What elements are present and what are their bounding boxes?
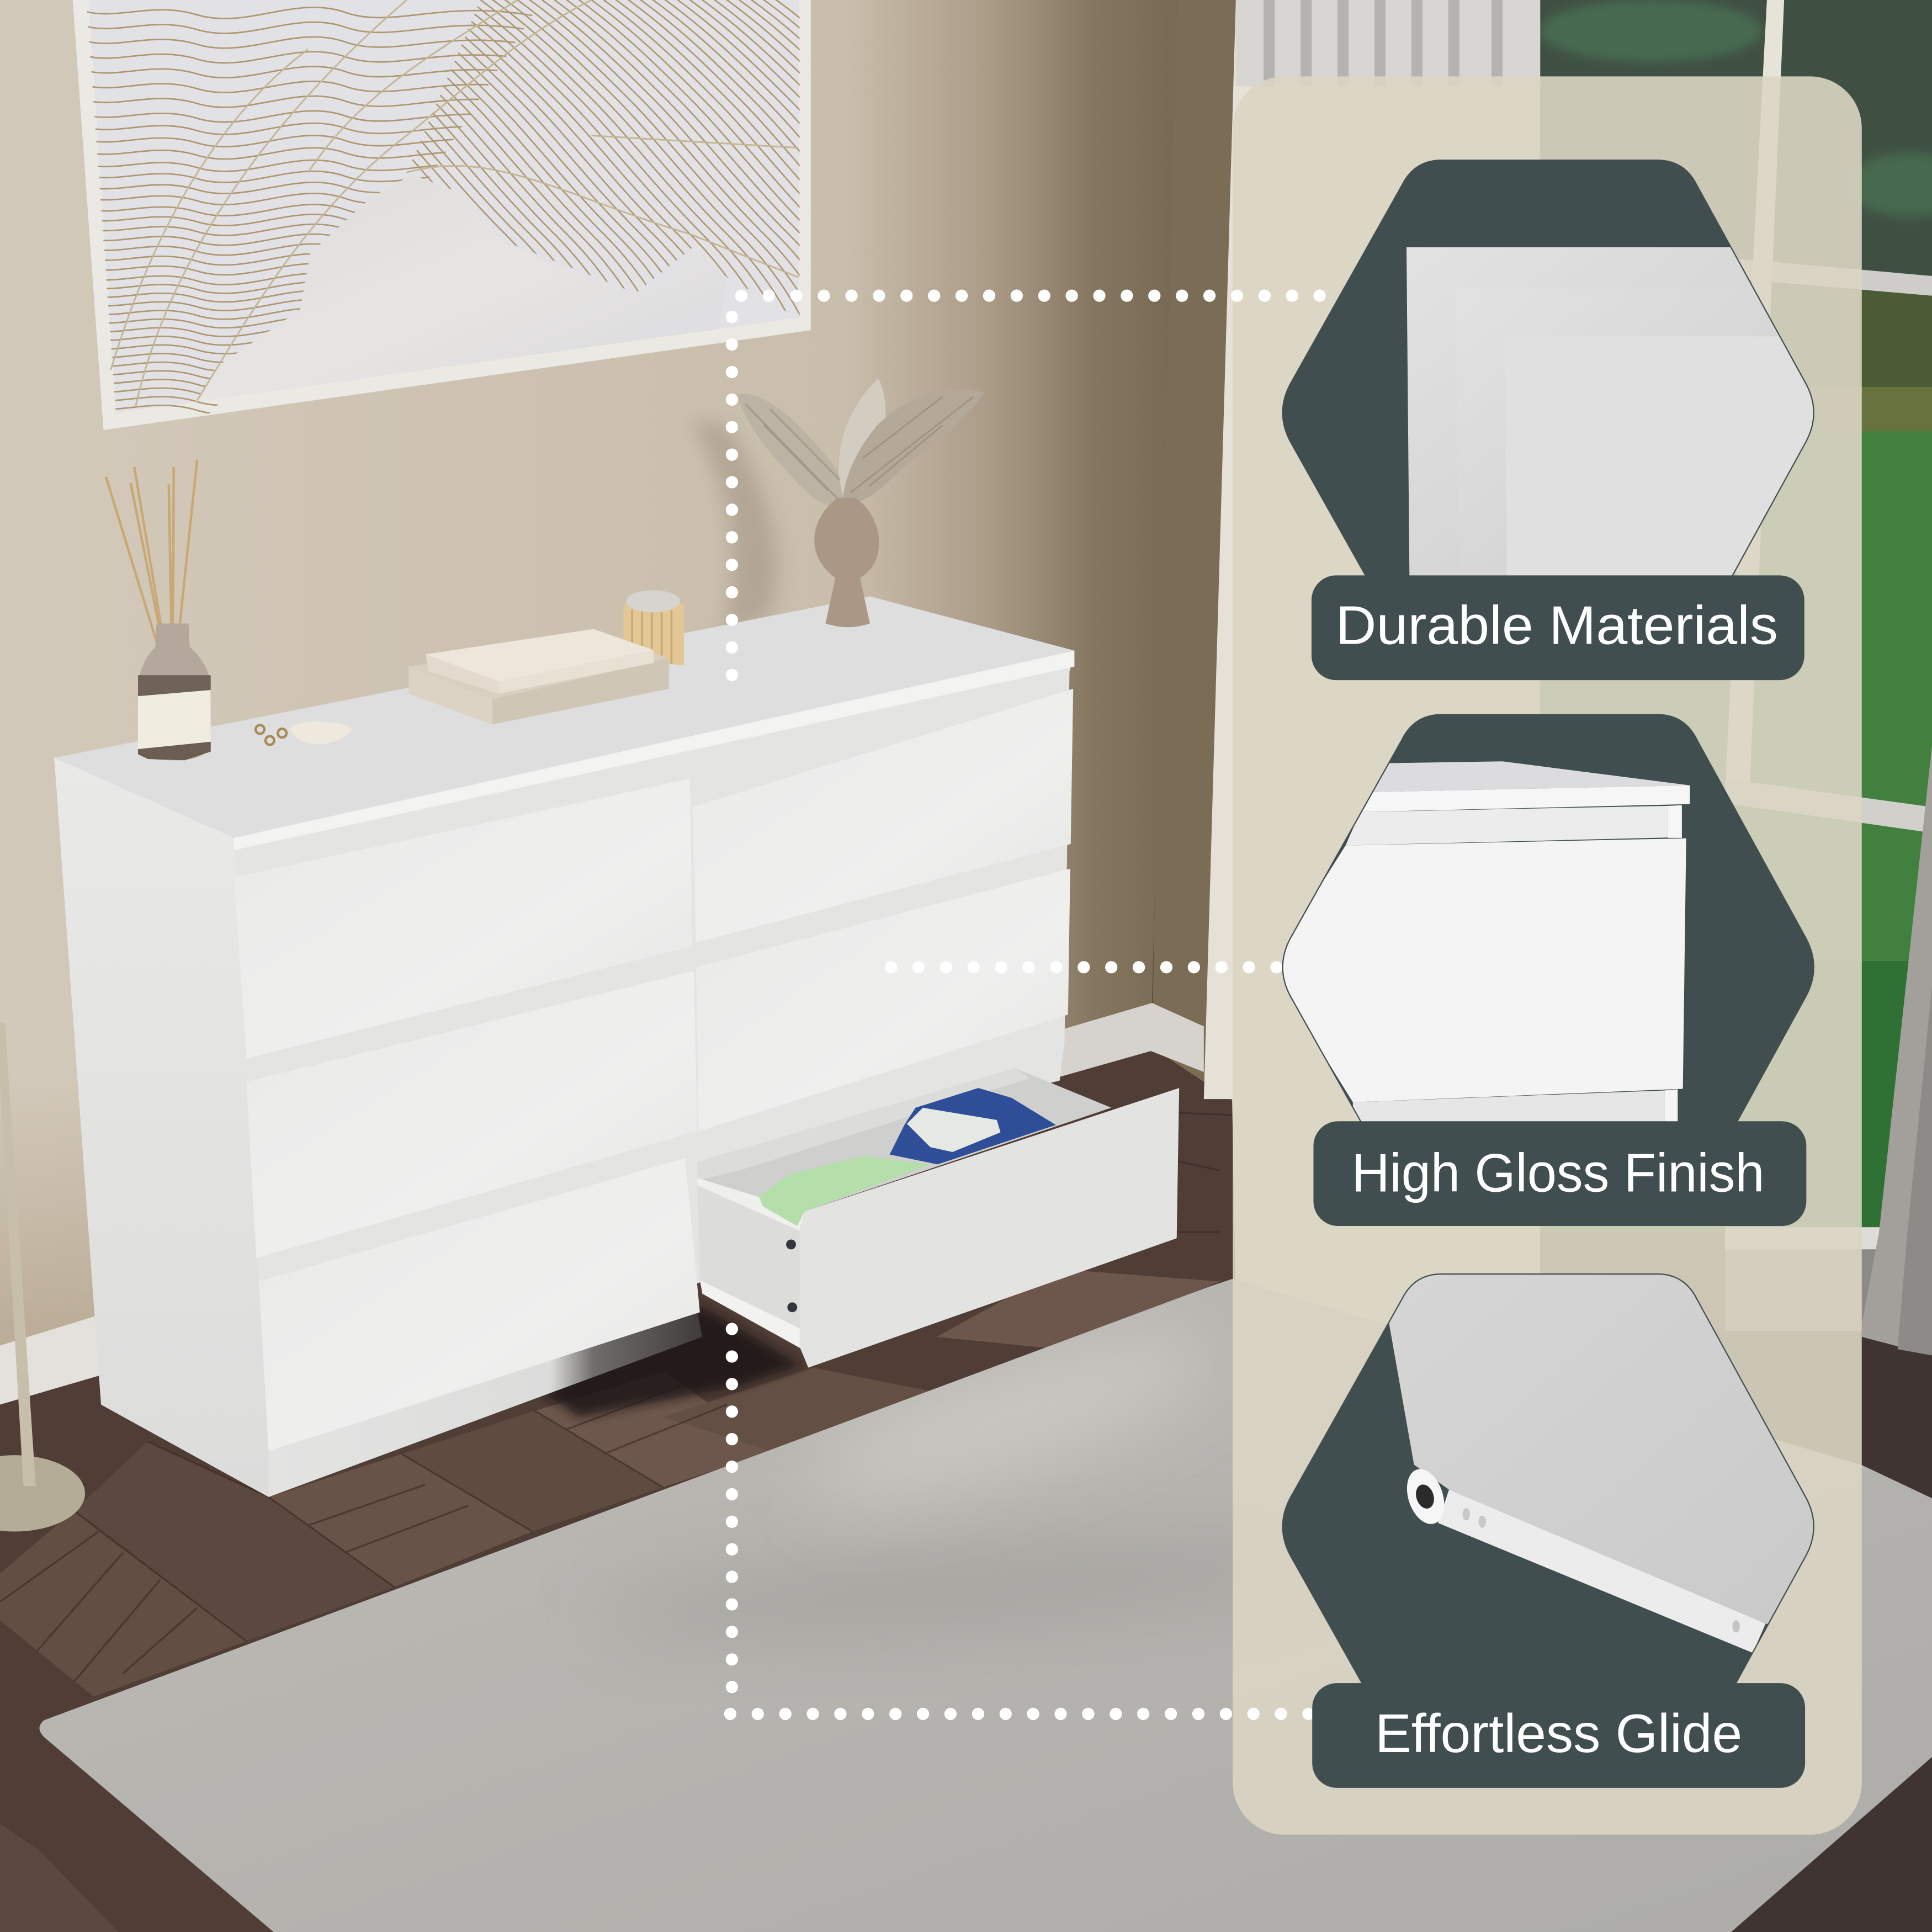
label: Effortless Glide	[1312, 1683, 1805, 1788]
panel: features background	[1233, 76, 1862, 1835]
drawer top left	[234, 779, 692, 1058]
dotted connector: High Gloss Finish	[887, 964, 1276, 970]
feature: High Gloss Finish	[1269, 715, 1814, 1226]
label: Effortless Glide: Effortless Glide	[1375, 1703, 1742, 1764]
hexagon: layered materials	[1282, 160, 1814, 575]
candle	[623, 590, 684, 665]
stacked books	[408, 629, 669, 724]
floor lamp base	[0, 1023, 85, 1532]
dresser top front edge	[234, 651, 1074, 850]
drawer middle right	[696, 869, 1070, 1131]
drawer bottom left	[259, 1158, 700, 1451]
dresser front carcass	[234, 654, 1074, 1451]
rug	[39, 1279, 1932, 1932]
window and garden	[1528, 0, 1932, 1331]
pampas wall shadow	[690, 419, 777, 635]
blue clothing	[890, 1088, 1056, 1164]
drawer middle left	[246, 971, 697, 1258]
green clothing	[759, 1156, 930, 1226]
dresser plinth	[269, 1312, 702, 1497]
open drawer	[697, 1068, 1179, 1368]
dotted connector: Effortless Glide	[727, 1329, 1309, 1714]
curtains	[1204, 0, 1932, 1368]
hexagon: drawer glide	[1283, 1249, 1836, 1779]
vase with pampas	[737, 378, 984, 627]
diffuser	[106, 460, 211, 760]
dotted connector: Durable Materials	[732, 296, 1320, 675]
hexagon: gloss surface	[1282, 714, 1814, 1122]
feature: Effortless Glide	[1283, 1249, 1836, 1788]
feature: Durable Materials	[1283, 160, 1836, 680]
label: High Gloss Finish: High Gloss Finish	[1352, 1142, 1764, 1203]
shadow under dresser	[542, 1306, 801, 1417]
label: Durable Materials	[1312, 575, 1804, 680]
white clothing	[907, 1108, 1000, 1152]
framed line art	[73, 0, 811, 430]
drawer front panel	[800, 1088, 1179, 1368]
drawer top right	[692, 689, 1073, 943]
dresser top	[54, 596, 1074, 838]
dresser side	[54, 758, 277, 1497]
dresser	[54, 378, 1179, 1497]
label: High Gloss Finish	[1313, 1121, 1806, 1226]
label: Durable Materials: Durable Materials	[1336, 595, 1778, 655]
ring dish	[256, 721, 352, 745]
